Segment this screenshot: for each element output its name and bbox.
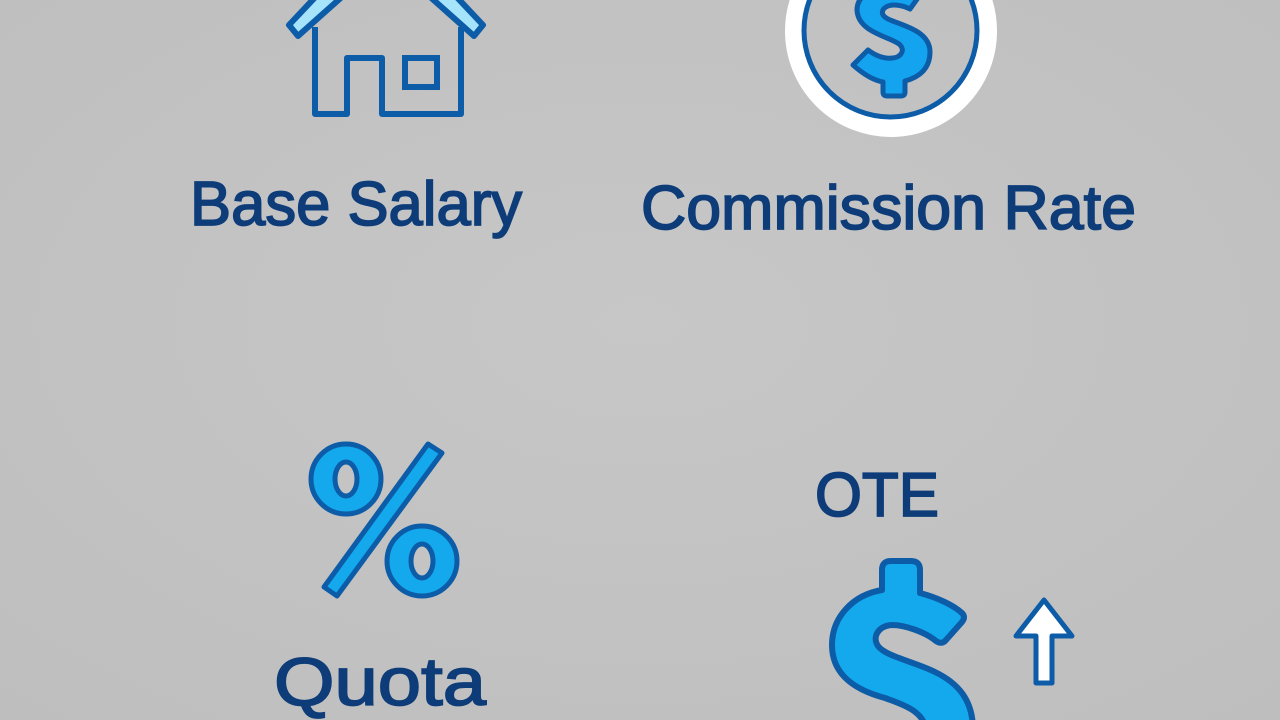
icon: up arrow <box>1016 600 1072 683</box>
heading: base salary: Base Salary <box>190 170 522 239</box>
panel: quota <box>274 444 486 720</box>
panel: commission rate <box>641 0 1136 243</box>
heading: OTE: OTE <box>815 461 939 530</box>
panel: OTE <box>815 461 1072 720</box>
icon: house <box>289 0 483 114</box>
heading: quota: Quota <box>274 644 486 720</box>
icon: large dollar sign <box>832 561 973 720</box>
panel: base salary <box>190 0 522 239</box>
heading: commission rate: Commission Rate <box>641 174 1136 243</box>
icon: dollar coin <box>794 0 988 128</box>
icon: percent sign <box>311 444 457 596</box>
